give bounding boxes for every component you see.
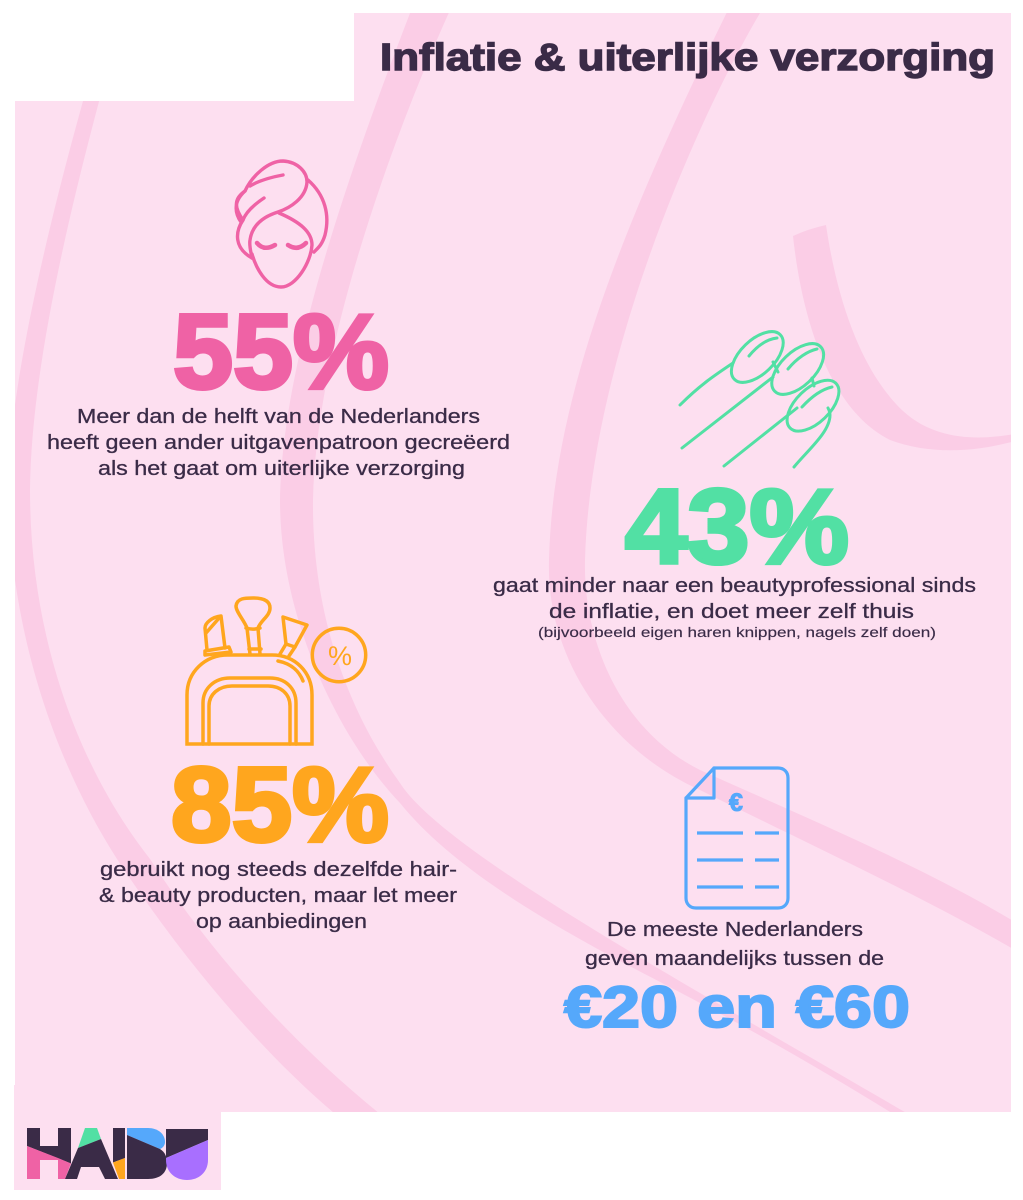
text block: 85% description: op aanbiedingen [196, 910, 367, 933]
logo: HAIBU [27, 1128, 208, 1180]
stat: 85%: 85% [171, 746, 389, 864]
text block: 85% description [99, 858, 457, 933]
text block: 43% description: de inflatie, en doet meer zelf thuis [549, 600, 914, 623]
icon label: euro sign: € [729, 789, 743, 817]
text block: 55% description [47, 405, 510, 480]
title: Inflatie & uiterlijke verzorging [380, 37, 995, 79]
stat: 43%: 43% [625, 468, 849, 586]
text block: 43% description: (bijvoorbeeld eigen haren knippen, nagels zelf doen) [538, 624, 936, 640]
text block: spending description: De meeste Nederlanders [607, 918, 863, 941]
stat: 55%: 55% [173, 293, 389, 411]
text block: 55% description: heeft geen ander uitgavenpatroon gecreëerd [47, 431, 510, 454]
text block: 43% description [493, 574, 976, 640]
text block: 43% description: gaat minder naar een beautyprofessional sinds [493, 574, 976, 597]
text block: 85% description: gebruikt nog steeds dezelfde hair- [100, 858, 457, 881]
text block: 85% description: & beauty producten, maar let meer [99, 884, 457, 907]
stat: spending range: €20 en €60 [564, 975, 910, 1040]
icon label: percent sign: % [328, 641, 352, 671]
icon: nails [680, 323, 848, 467]
icon: woman with towel [236, 161, 327, 287]
text block: 55% description: als het gaat om uiterlijke verzorging [98, 457, 465, 480]
text block: spending description: geven maandelijks tussen de [585, 947, 884, 970]
text block: 55% description: Meer dan de helft van de Nederlanders [77, 405, 480, 428]
icon: makeup bag [187, 598, 366, 744]
icon: invoice [686, 768, 788, 908]
text block: spending description [585, 918, 884, 970]
